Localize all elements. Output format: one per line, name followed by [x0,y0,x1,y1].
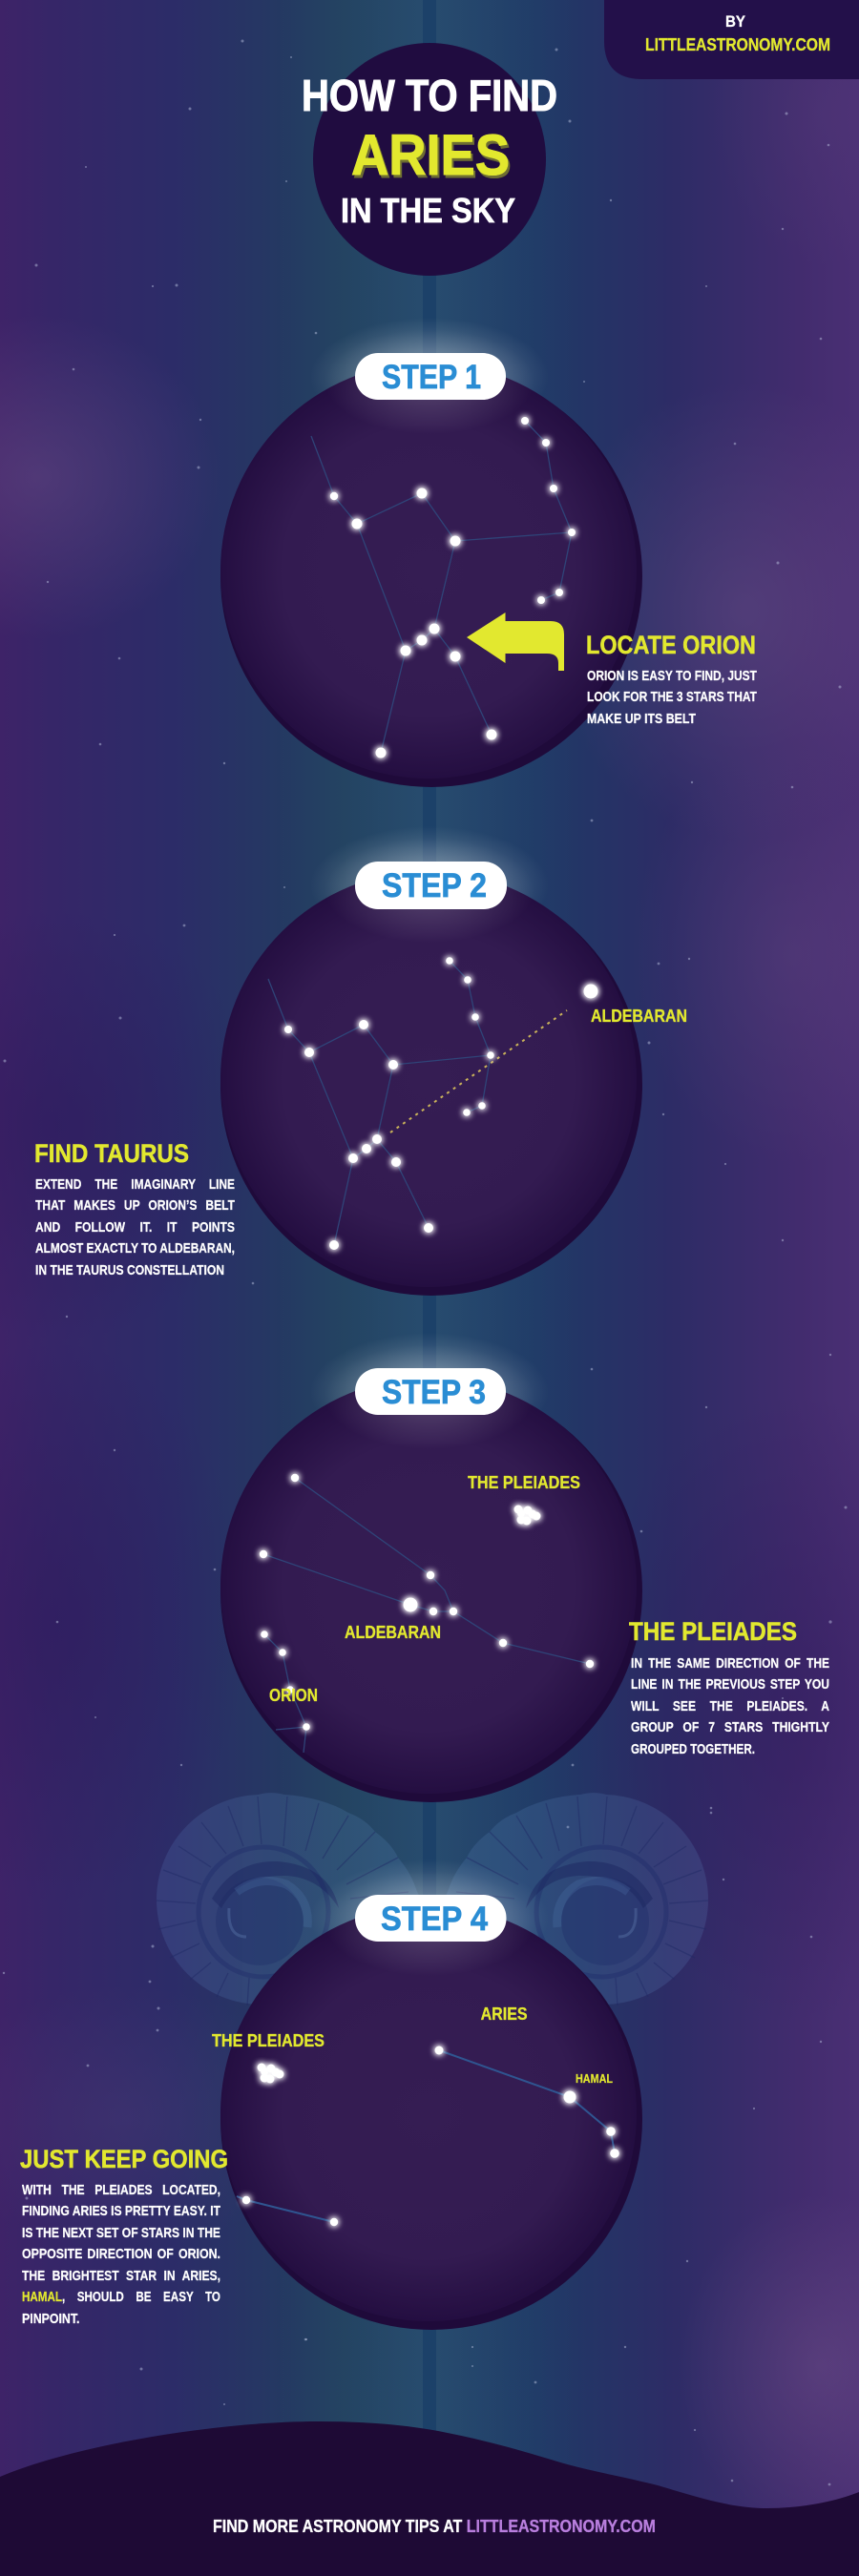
step 2 badge: STEP 2 [382,867,487,904]
footer text: FIND MORE ASTRONOMY TIPS AT LITTLEASTRONOMY.COM [213,2517,656,2536]
title line: how to find: HOW TO FIND [302,71,557,120]
body: just keep going: OPPOSITE DIRECTION OF ORION. [22,2246,220,2262]
star cluster: the pleiades [258,2063,284,2084]
heading: just keep going: JUST KEEP GOING [20,2145,228,2173]
horn: left [157,1793,431,2005]
body: just keep going [22,2182,220,2327]
step 4 badge [355,1895,506,1942]
constellation lines: orion [311,421,572,753]
star cluster: the pleiades [513,1506,540,1525]
panel: title circle [302,43,557,276]
text block: the pleiades [629,1617,829,1757]
step 2 badge [355,862,507,909]
body: locate orion: LOOK FOR THE 3 STARS THAT [587,689,757,705]
body: the pleiades [631,1655,829,1757]
byline site: LITTLEASTRONOMY.COM [645,35,830,54]
heading: the pleiades: THE PLEIADES [629,1617,797,1646]
stars: aries and taurus [242,2046,619,2226]
byline by: BY [725,12,746,31]
label: aldebaran: ALDEBARAN [345,1623,441,1642]
body: just keep going: HAMAL, SHOULD BE EASY TO [22,2289,220,2305]
label: aldebaran: ALDEBARAN [591,1007,687,1026]
central vertical light beam [423,0,436,2442]
label: hamal: HAMAL [576,2072,613,2086]
body: locate orion: ORION IS EASY TO FIND, JUST [587,668,757,684]
ram horns illustration [157,1793,708,2005]
body: find taurus: EXTEND THE IMAGINARY LINE [35,1176,235,1193]
heading: locate orion: LOCATE ORION [586,631,756,659]
body: just keep going: WITH THE PLEIADES LOCATED, [22,2182,220,2198]
label: aries: ARIES [481,2005,528,2024]
title line: aries: ARIES [351,123,510,187]
label: the pleiades: THE PLEIADES [468,1473,580,1492]
body: find taurus [35,1176,235,1278]
horn: right [433,1793,708,2005]
body: find taurus: THAT MAKES UP ORION’S BELT [35,1197,235,1214]
text block: just keep going [20,2145,228,2327]
body: just keep going: PINPOINT. [22,2311,80,2327]
text block: find taurus [34,1139,235,1278]
constellation lines: orion [268,961,491,1245]
stars: orion and aldebaran [284,957,597,1250]
label: orion: ORION [269,1686,318,1705]
body: just keep going: FINDING ARIES IS PRETTY EASY. IT [22,2203,220,2219]
step 3 badge: STEP 3 [382,1374,486,1411]
body: locate orion [587,668,757,727]
panel: step 2 disc [220,826,687,1296]
body: find taurus: IN THE TAURUS CONSTELLATION [35,1262,224,1278]
dotted line: belt extension to aldebaran [390,1010,567,1132]
heading: find taurus: FIND TAURUS [34,1139,189,1168]
step 3 badge [355,1368,506,1415]
text block: locate orion [586,631,757,727]
body: the pleiades: GROUPED TOGETHER. [631,1741,755,1757]
constellation lines: aries and taurus [237,2050,615,2222]
body: just keep going: IS THE NEXT SET OF STARS IN THE [22,2225,220,2241]
panel: step 1 disc [220,318,642,787]
body: just keep going: THE BRIGHTEST STAR IN ARIES, [22,2268,220,2284]
panel: footer wave [0,2421,859,2576]
panel: step 4 disc [212,1859,642,2330]
panel: step 3 disc [220,1333,642,1802]
step 1 badge [355,353,506,400]
label: the pleiades: THE PLEIADES [212,2031,325,2050]
arrow: pointing to orion's belt [467,613,564,671]
step 1 badge: STEP 1 [382,359,481,396]
panel: byline tab [604,0,859,79]
body: find taurus: ALMOST EXACTLY TO ALDEBARAN, [35,1240,235,1257]
stars: taurus and orion [260,1474,594,1731]
body: find taurus: AND FOLLOW IT. IT POINTS [35,1219,235,1236]
step 4 badge: STEP 4 [381,1901,488,1938]
title line: in the sky: IN THE SKY [341,191,515,230]
body: locate orion: MAKE UP ITS BELT [587,711,696,727]
constellation lines: taurus and orion [263,1478,590,1753]
stars: orion [330,417,576,758]
